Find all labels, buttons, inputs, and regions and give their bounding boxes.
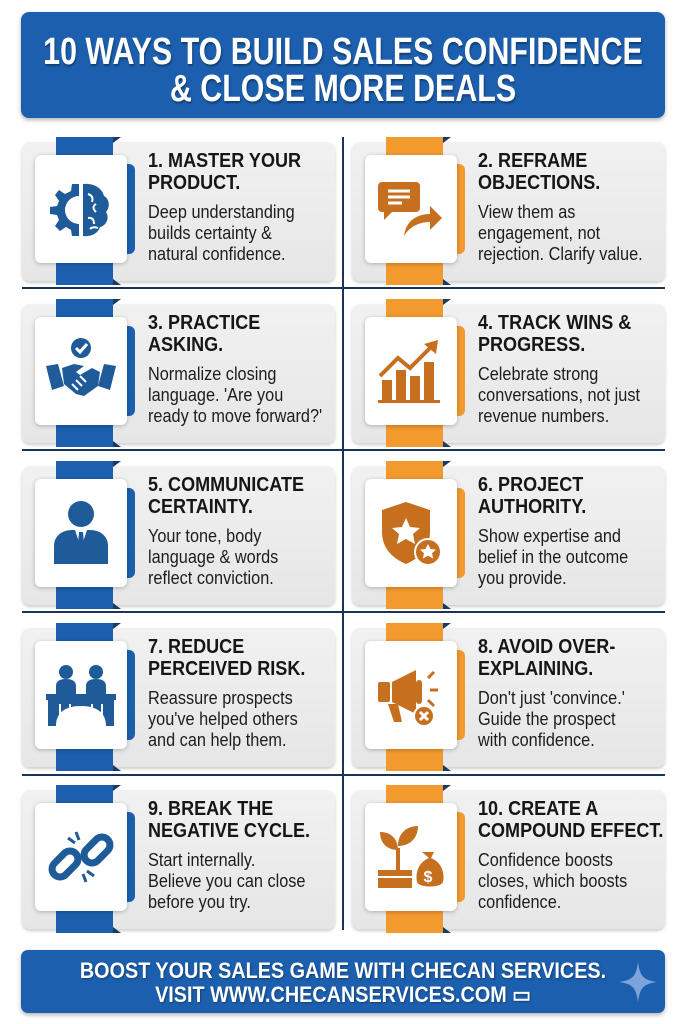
panel: 4 track wins xyxy=(350,299,666,447)
panel: 8 avoid over-explaining xyxy=(350,623,666,771)
panel: 5 communicate certainty: language & words xyxy=(148,546,278,567)
panel: 6 project authority xyxy=(350,461,666,609)
panel: 8 avoid over-explaining: EXPLAINING. xyxy=(478,657,593,680)
panel: 5 communicate certainty: reflect conviction. xyxy=(148,567,274,588)
panel: 2 reframe objections xyxy=(350,137,666,285)
panel: 8 avoid over-explaining: 8. AVOID OVER- xyxy=(478,635,615,658)
panel: 7 reduce perceived risk: 7. REDUCE xyxy=(148,635,244,658)
panel: 1 master your product: Deep understanding xyxy=(148,201,295,222)
panel: 2 reframe objections: 2. REFRAME xyxy=(478,149,587,172)
panel: 9 break the negative cycle: Start internally. xyxy=(148,849,255,870)
panel: 6 project authority: you provide. xyxy=(478,567,567,588)
panel: 5 communicate certainty: CERTAINTY. xyxy=(148,495,253,518)
panel: 4 track wins: 4. TRACK WINS & xyxy=(478,311,631,334)
panel: 2 reframe objections: View them as xyxy=(478,201,575,222)
panel: 3 practice asking: ready to move forward?' xyxy=(148,405,322,426)
panel: 1 master your product: natural confidence. xyxy=(148,243,286,264)
title: & CLOSE MORE DEALS xyxy=(170,68,516,110)
panel: 7 reduce perceived risk xyxy=(20,623,336,771)
panel: 3 practice asking xyxy=(20,299,336,447)
footer: VISIT WWW.CHECANSERVICES.COM ▭ xyxy=(155,982,531,1007)
panel: 5 communicate certainty: 5. COMMUNICATE xyxy=(148,473,304,496)
icon: gear brain xyxy=(35,155,127,263)
icon: plant money bag xyxy=(365,803,457,911)
title xyxy=(21,12,665,118)
panel: 8 avoid over-explaining: with confidence. xyxy=(478,729,595,750)
icon: handshake check xyxy=(35,317,127,425)
panel: 3 practice asking: language. 'Are you xyxy=(148,384,283,405)
footer: BOOST YOUR SALES GAME WITH CHECAN SERVICES. xyxy=(80,958,606,983)
icon: megaphone x xyxy=(365,641,457,749)
panel: 10 create a compound effect: Confidence boosts xyxy=(478,849,613,870)
panel: 6 project authority: 6. PROJECT xyxy=(478,473,583,496)
panel: 7 reduce perceived risk: PERCEIVED RISK. xyxy=(148,657,305,680)
panel: 8 avoid over-explaining: Don't just 'convince.' xyxy=(478,687,625,708)
icon: shield star xyxy=(365,479,457,587)
icon: growth chart xyxy=(365,317,457,425)
panel: 10 create a compound effect: closes, which boosts xyxy=(478,870,627,891)
panel: 9 break the negative cycle: 9. BREAK THE xyxy=(148,797,273,820)
panel: 3 practice asking: 3. PRACTICE xyxy=(148,311,260,334)
panel: 4 track wins: revenue numbers. xyxy=(478,405,609,426)
panel: 10 create a compound effect: confidence. xyxy=(478,891,561,912)
panel: 6 project authority: Show expertise and xyxy=(478,525,621,546)
panel: 7 reduce perceived risk: you've helped others xyxy=(148,708,298,729)
panel: 9 break the negative cycle: NEGATIVE CYCLE. xyxy=(148,819,310,842)
panel: 5 communicate certainty: Your tone, body xyxy=(148,525,261,546)
icon: sparkle xyxy=(620,962,656,1002)
panel: 8 avoid over-explaining: Guide the prospect xyxy=(478,708,616,729)
panel: 3 practice asking: Normalize closing xyxy=(148,363,276,384)
panel: 4 track wins: conversations, not just xyxy=(478,384,640,405)
icon: plant money bag: $ xyxy=(424,869,433,886)
panel: 7 reduce perceived risk: and can help them. xyxy=(148,729,286,750)
panel: 1 master your product xyxy=(20,137,336,285)
panel: 10 create a compound effect: COMPOUND EFFECT. xyxy=(478,819,663,842)
panel: 2 reframe objections: rejection. Clarify value. xyxy=(478,243,643,264)
panel: 7 reduce perceived risk: Reassure prospects xyxy=(148,687,293,708)
panel: 5 communicate certainty xyxy=(20,461,336,609)
panel: 4 track wins: Celebrate strong xyxy=(478,363,598,384)
icon: chat arrow xyxy=(365,155,457,263)
footer xyxy=(21,950,665,1013)
panel: 9 break the negative cycle: Believe you can close xyxy=(148,870,305,891)
panel: 2 reframe objections: engagement, not xyxy=(478,222,600,243)
icon: people on bridge xyxy=(35,641,127,749)
panel: 10 create a compound effect xyxy=(350,785,666,933)
panel: 1 master your product: PRODUCT. xyxy=(148,171,240,194)
icon: broken chain xyxy=(35,803,127,911)
title: 10 WAYS TO BUILD SALES CONFIDENCE xyxy=(43,31,643,73)
panel: 4 track wins: PROGRESS. xyxy=(478,333,585,356)
panel: 3 practice asking: ASKING. xyxy=(148,333,223,356)
panel: 1 master your product: 1. MASTER YOUR xyxy=(148,149,301,172)
panel: 1 master your product: builds certainty & xyxy=(148,222,272,243)
panel: 9 break the negative cycle: before you try. xyxy=(148,891,251,912)
panel: 9 break the negative cycle xyxy=(20,785,336,933)
panel: 10 create a compound effect: 10. CREATE A xyxy=(478,797,598,820)
icon: business person xyxy=(35,479,127,587)
panel: 6 project authority: belief in the outcome xyxy=(478,546,628,567)
panel: 6 project authority: AUTHORITY. xyxy=(478,495,586,518)
panel: 2 reframe objections: OBJECTIONS. xyxy=(478,171,600,194)
